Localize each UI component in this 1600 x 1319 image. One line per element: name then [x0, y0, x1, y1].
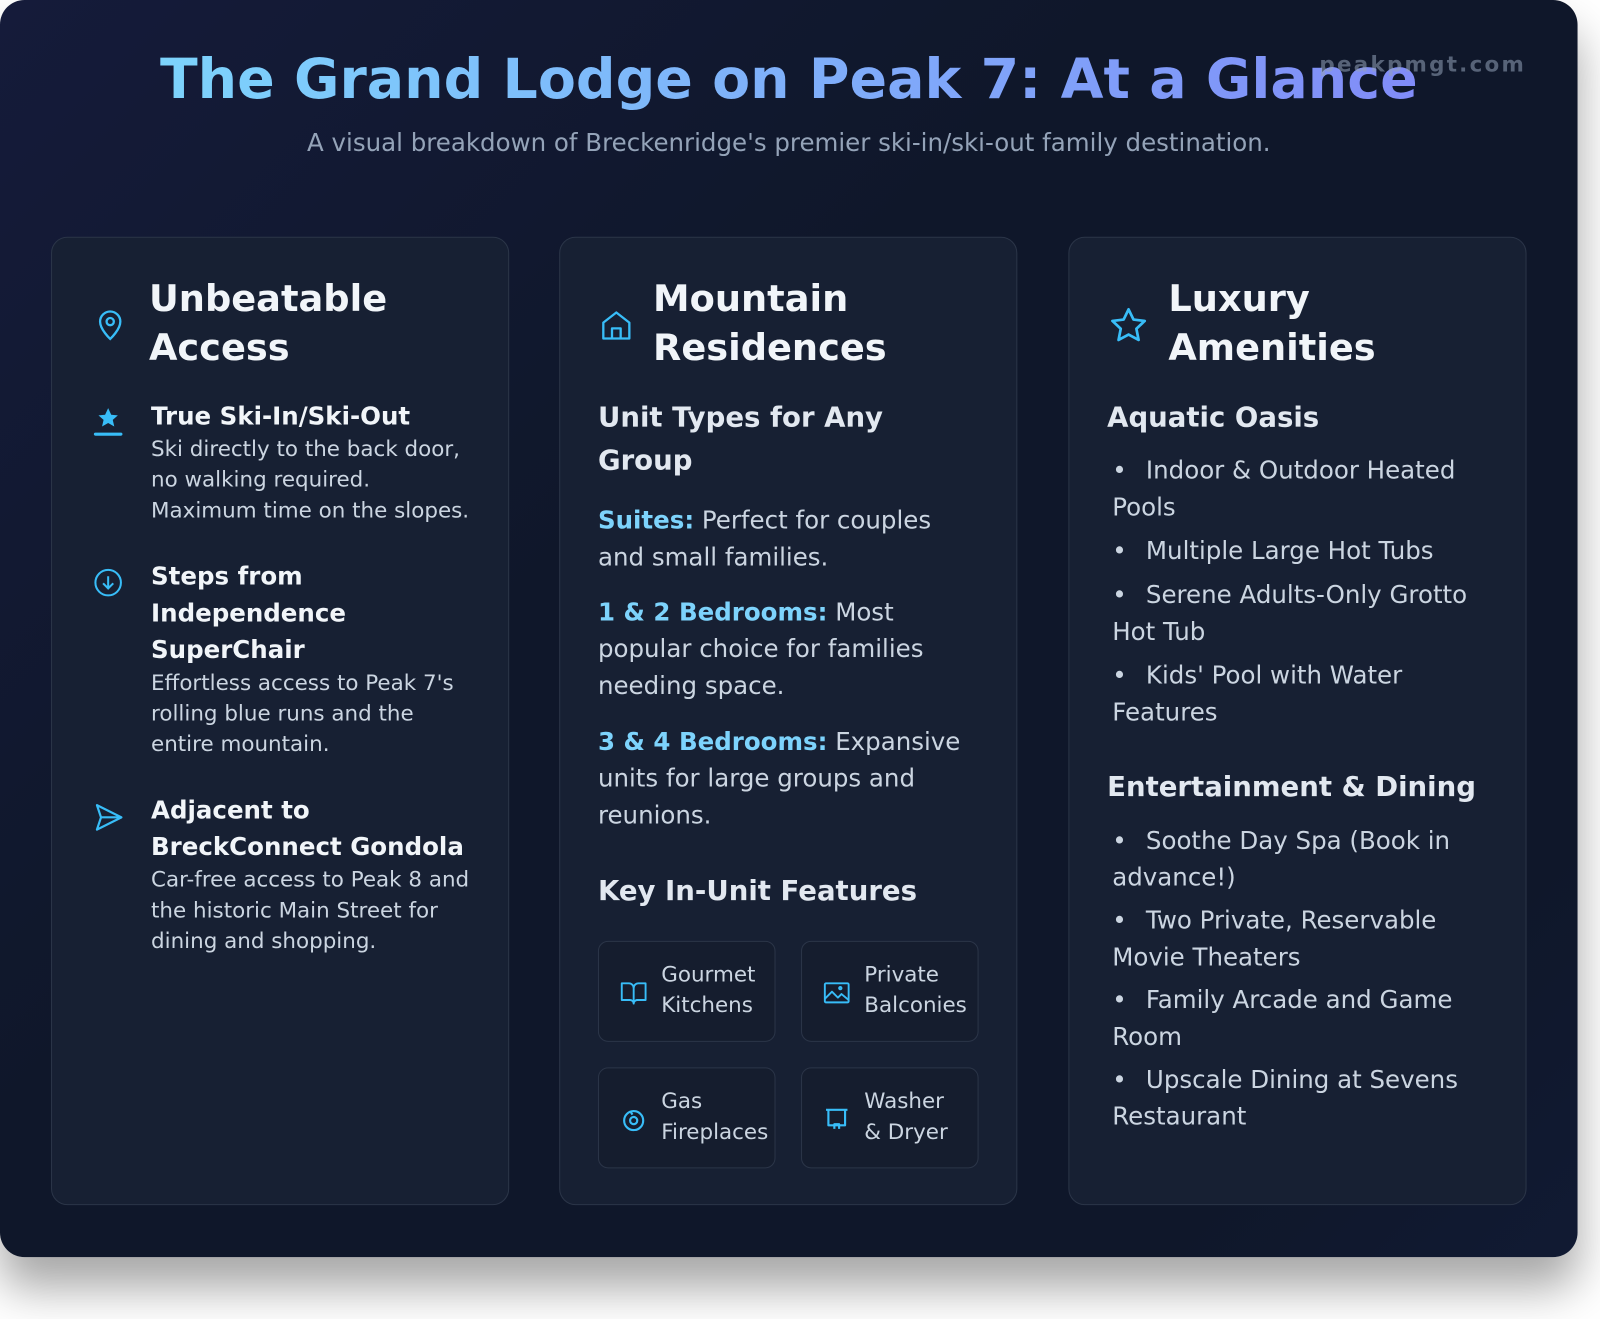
text: suites: and small families.: [598, 543, 828, 571]
aquatic list: [1112, 456, 1467, 727]
aquatic list: Kids' Pool with Water: [1146, 661, 1402, 690]
aquatic list: Multiple Large Hot Tubs: [1146, 537, 1434, 565]
heading: Residences: [653, 328, 887, 369]
text: 3 & 4 bedrooms: units for large groups and: [598, 764, 915, 793]
feature: washer dryer: [801, 1067, 979, 1168]
entertainment list: •: [1112, 986, 1127, 1014]
feature: balconies: Balconies: [864, 993, 967, 1017]
item: breckconnect gondola: Car-free access to Peak 8 and: [151, 867, 469, 892]
item: breckconnect gondola: [96, 796, 469, 953]
feature: washer dryer: & Dryer: [864, 1119, 948, 1144]
entertainment list: Movie Theaters: [1112, 943, 1301, 971]
entertainment list: •: [1112, 906, 1127, 935]
aquatic list: •: [1112, 581, 1127, 609]
icon: house: [602, 311, 630, 340]
aquatic list: Serene Adults-Only Grotto: [1146, 581, 1467, 609]
feature: fireplaces: Gas: [661, 1089, 702, 1113]
item: independence superchair: Independence: [151, 599, 346, 628]
item: breckconnect gondola: dining and shopping.: [151, 929, 376, 953]
text: 1 & 2 bedrooms: 1 & 2 Bedrooms: Most: [598, 598, 894, 627]
heading: [653, 279, 887, 369]
text: suites: [598, 506, 931, 571]
text: 3 & 4 bedrooms: reunions.: [598, 801, 711, 830]
item: ski in ski out: Maximum time on the slopes.: [151, 498, 469, 522]
feature: kitchens: Gourmet: [661, 962, 755, 987]
feature: washer dryer: Washer: [864, 1089, 944, 1113]
entertainment list: Upscale Dining at Sevens: [1146, 1065, 1458, 1094]
entertainment subheading: Entertainment & Dining: [1107, 771, 1476, 803]
item: independence superchair: Effortless access to Peak 7's: [151, 670, 454, 695]
text: 1 & 2 bedrooms: popular choice for families: [598, 635, 924, 663]
aquatic subheading: Aquatic Oasis: [1107, 402, 1319, 434]
text: 3 & 4 bedrooms: 3 & 4 Bedrooms: Expansive: [598, 728, 960, 756]
heading: Amenities: [1168, 328, 1376, 369]
aquatic list: •: [1112, 537, 1127, 565]
subtitle: A visual breakdown of Breckenridge's premier ski-in/ski-out family destination.: [307, 129, 1271, 157]
feature: balconies: [801, 941, 979, 1042]
item: independence superchair: entire mountain.: [151, 732, 330, 756]
features subheading: Key In-Unit Features: [598, 876, 917, 907]
aquatic list: •: [1112, 661, 1127, 690]
entertainment list: Restaurant: [1112, 1102, 1246, 1131]
heading: [149, 279, 387, 369]
feature: balconies: Private: [864, 962, 939, 987]
icon: paper plane: [96, 804, 122, 831]
aquatic list: •: [1112, 456, 1127, 485]
entertainment list: Soothe Day Spa (Book in: [1146, 827, 1450, 855]
text: 1 & 2 bedrooms: [598, 598, 924, 700]
text: 1 & 2 bedrooms: needing space.: [598, 671, 784, 700]
panel: unbeatable access: [51, 237, 509, 1205]
heading: Unbeatable: [149, 279, 387, 320]
heading: Mountain: [653, 279, 848, 320]
item: ski in ski out: Ski directly to the back door,: [151, 437, 460, 461]
item: independence superchair: SuperChair: [151, 636, 305, 664]
entertainment list: advance!): [1112, 863, 1236, 892]
icon: star: [1111, 308, 1146, 342]
feature: kitchens: Kitchens: [661, 993, 753, 1017]
icon: circle arrow down: [94, 568, 122, 596]
aquatic list: Features: [1112, 698, 1218, 727]
entertainment list: •: [1112, 827, 1127, 855]
unit types subheading: Group: [598, 445, 692, 477]
icon: map pin: [98, 310, 122, 340]
item: ski in ski out: True Ski-In/Ski-Out: [151, 402, 410, 431]
aquatic list: Indoor & Outdoor Heated: [1146, 456, 1455, 485]
entertainment list: [1112, 827, 1458, 1131]
unit types subheading: Unit Types for Any: [598, 402, 883, 434]
heading: Access: [149, 328, 290, 369]
panel: luxury amenities: [1068, 237, 1527, 1205]
item: breckconnect gondola: the historic Main Street for: [151, 898, 438, 922]
title: The Grand Lodge on Peak 7: At a Glance: [160, 47, 1418, 111]
item: independence superchair: [94, 562, 454, 756]
feature: kitchens: [598, 941, 776, 1042]
item: independence superchair: rolling blue runs and the: [151, 701, 414, 726]
watermark: peakpmgt.com: [1319, 52, 1526, 77]
feature: fireplaces: [598, 1067, 776, 1168]
heading: [1168, 279, 1376, 369]
entertainment list: Family Arcade and Game: [1146, 986, 1452, 1014]
text: 3 & 4 bedrooms: [598, 728, 960, 830]
item: independence superchair: Steps from: [151, 562, 303, 591]
aquatic list: Hot Tub: [1112, 617, 1205, 646]
item: breckconnect gondola: BreckConnect Gondola: [151, 833, 464, 861]
icon: star underline: [94, 408, 122, 436]
aquatic list: Pools: [1112, 493, 1176, 521]
entertainment list: Two Private, Reservable: [1146, 906, 1436, 935]
text: suites: Suites: Perfect for couples: [598, 506, 931, 535]
item: ski in ski out: no walking required.: [151, 467, 370, 492]
heading: Luxury: [1168, 279, 1310, 320]
entertainment list: Room: [1112, 1022, 1182, 1051]
feature: fireplaces: Fireplaces: [661, 1119, 768, 1144]
panel: mountain residences: [559, 237, 1017, 1205]
item: breckconnect gondola: Adjacent to: [151, 796, 310, 824]
item: ski in ski out: [94, 402, 469, 522]
unit types subheading: [598, 402, 883, 477]
entertainment list: •: [1112, 1065, 1127, 1094]
